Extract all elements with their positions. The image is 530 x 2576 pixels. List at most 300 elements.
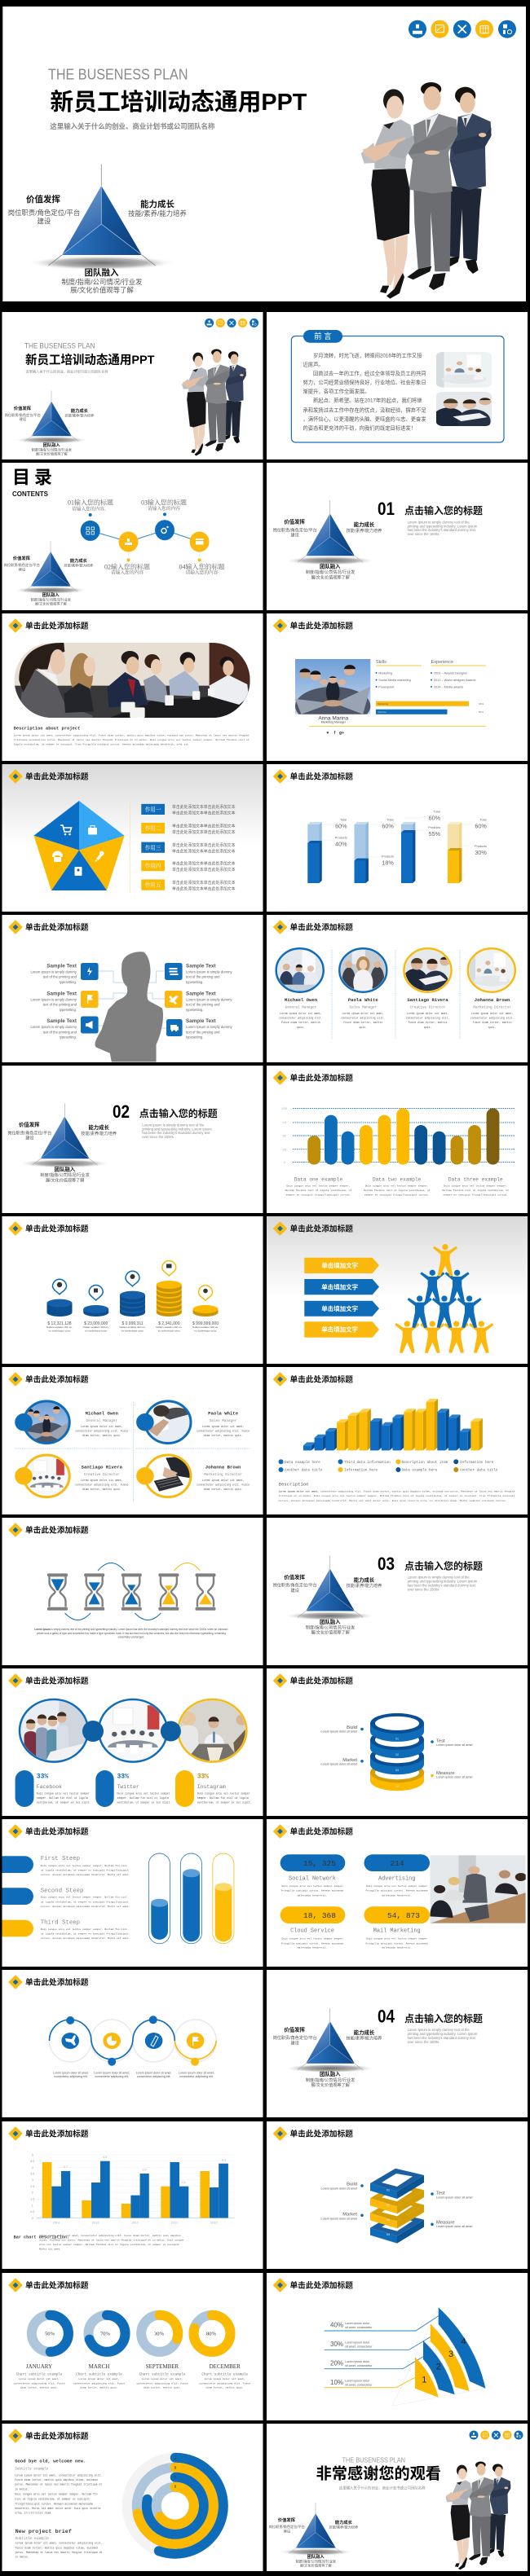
icon row (470, 2431, 523, 2439)
pyramid diagram: 岗位职责/角色定位/平台 (5, 412, 41, 418)
stat captions: Duis congue arcu vel lectus semper semper (282, 1884, 343, 1888)
portrait text: General Manager (285, 1005, 317, 1010)
donut values: 50% (45, 2332, 55, 2337)
3D columns (303, 1399, 483, 1450)
pyramid diagram: 建设 (19, 566, 26, 572)
portrait text: Michael Owen (285, 997, 318, 1003)
pyramid diagram: 制度/指南/公司情况/行业发 (296, 2559, 337, 2565)
pyramid diagram: 能力成长 (335, 2519, 353, 2525)
slide 22: tubes (2, 1819, 263, 1967)
portrait text: Sales Manager (350, 1005, 377, 1010)
donut descriptions: Lorem ipsum dolor sit amet, (205, 2377, 245, 2380)
pyramid diagram: 能力成长 (71, 407, 89, 414)
description: tristique euismod non purus. Maecenas ut lacus nec mauris feugiat tristique et in metus. Duis congue arcu vel lectus semper semper. Nullam finibus nisl ut (14, 738, 250, 741)
legend text: 单击此处添加文本单击此处添加文本 (172, 861, 236, 867)
step text: cursus. Aenean accumsan malesuada hendrerit. Morbi sit amet. (41, 1873, 130, 1876)
stat captions: fringilla suscipit cursus. Aenean accumsan (365, 1889, 428, 1892)
stat text 1: Facebook (37, 1784, 62, 1790)
donut descriptions: Lorem ipsum dolor sit amet, (78, 2377, 120, 2380)
slide header: 单击此处添加标题 (25, 1976, 89, 1987)
slide header: 单击此处添加标题 (25, 1524, 89, 1535)
left callouts: Lorem ipsum dolor sit amet (321, 1730, 357, 1734)
section pyramid and heading: 能力成长 (354, 521, 375, 528)
portrait text: consectetur adipiscing elit. (279, 1017, 323, 1020)
chart captions: Duis congue arcu vel lectus semper semper. (287, 1185, 351, 1188)
stat pills: 15, 325 (303, 1859, 336, 1868)
intro text: Duis congue arcu vel lectus semper semper. Nullam fin (15, 2493, 98, 2496)
slide header: 单击此处添加标题 (25, 2279, 89, 2290)
sail labels: sit amet, consectetur (345, 2326, 373, 2329)
foreword panel border (291, 336, 504, 442)
contents labels: 请输入您的内容。 (72, 506, 109, 512)
pyramid diagram: 能力成长 (70, 557, 88, 564)
chart note (14, 2234, 184, 2251)
section pyramid and heading: 技能/素养/能力培养 (81, 1131, 117, 1136)
stat captions: Duis congue arcu vel lectus semper semper (282, 1937, 343, 1941)
profile name: Marketing Manager (321, 720, 347, 723)
contents nodes (81, 512, 210, 562)
team text: Santiago Rivera (82, 1464, 123, 1470)
stat text 3: vestibulum, ut semper ex sus sipit. (197, 1800, 252, 1804)
connector line (91, 530, 200, 542)
wave captions: Lorem ipsum dolor sit amet, (179, 2071, 214, 2074)
portrait text: Creative Director (410, 1005, 446, 1010)
radial labels: A (174, 2456, 177, 2461)
portrait text: consectetur adipiscing elit. (342, 1017, 385, 1020)
portrait text: Johanna Brown (475, 997, 510, 1003)
bar chart: 2014 (53, 2221, 60, 2224)
stacked rings: 02 (395, 1753, 399, 1756)
pyramid diagram: 展/文化价值观等了解 (36, 451, 68, 456)
contents labels: 请输入您的内容 (148, 505, 180, 512)
bar chart: 4.5 (103, 2156, 107, 2159)
y axis labels: 50 (282, 1134, 287, 1138)
slide 9: 3D bars (267, 764, 528, 912)
slide header (9, 1222, 89, 1235)
right callouts: Measure (436, 1771, 455, 1776)
stat pills: 18, 368 (303, 1911, 336, 1920)
section pyramid and heading: 团队融入 (320, 2070, 341, 2077)
chart captions: Data one example (294, 1176, 342, 1183)
team text: Lorem ipsum dolor sit amet, (81, 1479, 123, 1482)
step text (41, 1856, 130, 1940)
legend boxes: 作用一 (145, 806, 161, 813)
section pyramid and heading: 展/文化价值观等了解 (311, 1630, 350, 1636)
section pyramid and heading (273, 499, 483, 580)
radial labels: D (174, 2484, 177, 2489)
section pyramid and heading (273, 1554, 483, 1636)
stat captions: malesuada hendrerit. (382, 1946, 412, 1950)
chart captions: Nullam finibus nisl ut ligula vestibulum, ut (364, 1189, 431, 1192)
donut descriptions: diam tortor, mattis quis. (205, 2386, 244, 2389)
pyramid diagram: 展/文化价值观等了解 (35, 601, 67, 607)
stacked boxes: 01 (386, 2188, 390, 2191)
chart note: Bar chart description: (14, 2235, 69, 2240)
donut values: 80% (206, 2332, 217, 2337)
slide header: 单击此处添加标题 (290, 1675, 353, 1686)
pyramid diagram: 技能/素养/能力培养 (64, 412, 95, 418)
slide header: 单击此处添加标题 (25, 2128, 89, 2139)
project brief (15, 2529, 103, 2559)
stat text 3: semper. Nullam fin nisl ut ligula (197, 1796, 249, 1800)
experience list: 2001 – Awards Designer (434, 671, 468, 675)
column chart (307, 815, 477, 883)
tagline: 这里输入关于什么的创业、商业计划书或公司团队名称 (26, 368, 108, 374)
chart captions (285, 1176, 509, 1196)
contents labels: 01输入您的标题 (68, 498, 113, 506)
title: 新员工培训动态通用PPT (25, 352, 155, 367)
legend text: 单击此处添加文本单击此处添加文本 (172, 849, 236, 855)
column labels: Total (434, 810, 440, 813)
skills list: Marketing (378, 671, 392, 675)
foreword text: 承和发扬过去工作中存在的优点，汲取经验，摒弃不足 (303, 406, 426, 413)
column labels: 60% (382, 823, 394, 830)
connecting arcs (65, 1563, 200, 1620)
stat text 1: semper. Nullam fin nisl ut ligula (37, 1796, 88, 1800)
team text: consectetur adipiscing elit. Fusce (75, 1429, 128, 1432)
icon row (409, 20, 516, 38)
photo: team huddle (295, 659, 370, 714)
slide 31: thank you (267, 2424, 528, 2571)
slide header: 单击此处添加标题 (290, 921, 353, 932)
slide 23: stats and photo (267, 1819, 528, 1967)
chart note: arcu vel lectus semper semper. Nullam finibus nisl ut ligula vestibulum, ut semper ex suscipit (39, 2243, 179, 2246)
stat captions: Cloud Service (290, 1928, 334, 1935)
bar chart: 2012 (132, 2221, 139, 2224)
caption (34, 1628, 228, 1639)
right callouts: Lorem ipsum dolor sit amet (436, 1743, 472, 1747)
stat captions: Social Network (289, 1876, 336, 1883)
slide header: 单击此处添加标题 (290, 2279, 353, 2290)
radial labels: C (174, 2475, 177, 2480)
sail wedges: 4 (461, 2337, 466, 2347)
sail wedges: 3 (448, 2350, 453, 2359)
legend text: 单击此处添加文本单击此处添加文本 (172, 867, 236, 873)
bar chart: 2011 (171, 2221, 178, 2224)
legend text: 单击此处添加文本单击此处添加文本 (172, 842, 236, 848)
intro text: purus. Maecenas ut lacus nec mauris feugiat tristique et (15, 2483, 102, 2486)
team text: Lorem ipsum dolor sit amet, (202, 1425, 245, 1428)
right captions: typesetting. (186, 1035, 203, 1040)
stat text 1: Duis congue arcu vel lectus semper (37, 1791, 90, 1795)
stat pills: 54, 873 (387, 1911, 420, 1920)
donut descriptions: Chart subtitle example (16, 2372, 63, 2377)
step text: cursus. Aenean accumsan malesuada hendrerit. Morbi sit amet. (41, 1905, 130, 1908)
subtitle english: THE BUSENESS PLAN (24, 341, 95, 349)
social icons (327, 731, 344, 736)
stack values: eu scelerisque tortor (158, 1330, 180, 1333)
stat text 3: 33% (197, 1773, 209, 1780)
photo: three business people (361, 82, 492, 299)
project brief: New project brief (15, 2529, 72, 2535)
tagline: 这里输入关于什么的创业、商业计划书或公司团队名称 (339, 2485, 426, 2491)
description (14, 727, 250, 746)
leader lines (325, 2316, 439, 2388)
pyramid diagram: 建设 (284, 2528, 291, 2534)
chart legend: Third data information (344, 1461, 391, 1465)
team text: consectetur adipiscing elit. Fusce (197, 1483, 250, 1486)
slide header (274, 1373, 353, 1386)
step text: First Steep (41, 1856, 80, 1862)
legend text: 单击此处添加文本单击此处添加文本 (172, 811, 236, 816)
section pyramid and heading: has been the industry's standard dummy text (408, 528, 476, 532)
team text: Michael Owen (86, 1411, 119, 1417)
slide 3: foreword (267, 312, 528, 459)
left captions: text of the printing and (43, 974, 77, 979)
experience list: 2012 – World designer Awards (434, 679, 476, 682)
stack values: Nullam sodales nibh eu, (83, 1325, 109, 1329)
tagline: 这里输入关于什么的创业、商业计划书或公司团队名称 (50, 122, 215, 130)
wave captions (53, 2071, 214, 2078)
bar chart: 2.5 (181, 2181, 186, 2184)
radial bar chart (127, 2458, 223, 2554)
chart note: Lorem ipsum dolor sit amet, consectetur adipiscing elit. Fusce diam tortor, mattis quis dapibus (39, 2234, 181, 2237)
slide 18: hourglasses (2, 1518, 263, 1665)
caption: printer took a galley of type and scrambled it to make a type specimen book. It has survived not only five centuries, but also the leap into electronic typesetting, remaining (37, 1632, 226, 1635)
stat captions: malesuada hendrerit. (382, 1893, 412, 1897)
section pyramid and heading: 建设 (291, 533, 299, 538)
stat text 2: vestibulum, ut semper ex sus sipit. (117, 1800, 172, 1804)
section pyramid and heading: 制度/指南/公司情况/行业发 (40, 1172, 90, 1178)
slide 1: cover (2, 7, 526, 301)
pyramid diagram: 团队融入 (85, 267, 119, 278)
section pyramid and heading: 建设 (291, 2040, 299, 2046)
pyramid diagram: 价值发挥 (14, 405, 32, 411)
left callouts: Lorem ipsum dolor sit amet (321, 2187, 357, 2190)
stat captions (281, 1876, 428, 1950)
sail labels: 40% (330, 2322, 343, 2329)
chart captions: semper ex suscipit fringillasucipit cursus. (364, 1193, 430, 1196)
section pyramid and heading: 岗位职责/角色定位/平台 (273, 2035, 317, 2041)
donut values: 70% (100, 2332, 111, 2337)
section pyramid and heading: 价值发挥 (284, 1573, 306, 1580)
chart captions: semper ex suscipit fringillasucipit cursus. (443, 1193, 508, 1196)
skills list: Skills (376, 660, 386, 665)
section pyramid and heading: 点击输入您的标题 (139, 1107, 218, 1119)
skill bars: 94% (479, 702, 484, 706)
slide header (274, 921, 353, 934)
left captions (30, 963, 77, 1040)
right captions: Sample Text (186, 1018, 217, 1024)
intro text: Fusce diam tortor, mattis quis dapibus vitae, euismod (15, 2478, 98, 2481)
section pyramid and heading: 技能/素养/能力培养 (347, 2036, 382, 2042)
section pyramid and heading (273, 2007, 483, 2088)
social icons: ♥ (327, 731, 329, 736)
slide header: 单击此处添加标题 (290, 1072, 353, 1083)
chart captions: Data two example (373, 1176, 422, 1183)
pyramid diagram: 展/文化价值观等了解 (70, 286, 134, 294)
intro text: nisl ut ligula vestibulum, ut semper ex suscipit (15, 2498, 90, 2501)
arrow labels: 单击填加文字 (321, 1325, 359, 1334)
donut descriptions: diam tortor, mattis quis. (20, 2386, 58, 2389)
slide 24: wave process (2, 1970, 263, 2117)
right callouts: Lorem ipsum dolor sit amet (436, 2196, 472, 2199)
bar chart: 2013 (92, 2221, 99, 2224)
pyramid diagram: 团队融入 (42, 591, 60, 598)
left captions: Lorem Ipsum is simply dummy (30, 1025, 77, 1029)
contents labels (68, 498, 225, 575)
profile name: Anna Marina (318, 715, 349, 721)
chart legend: Another data title (460, 1468, 498, 1473)
y axis labels: 4.5 (30, 2160, 34, 2163)
left captions: Lorem Ipsum is simply dummy (30, 969, 77, 974)
slide header (274, 1222, 353, 1235)
project brief: in metus. (15, 2556, 29, 2559)
radial labels: B (174, 2466, 177, 2471)
section pyramid and heading: 能力成长 (354, 1576, 375, 1584)
photo: meeting room (436, 352, 492, 388)
donut descriptions: Chart subtitle example (139, 2372, 186, 2377)
y axis labels: 0.5 (30, 2210, 34, 2213)
photo: handshake (436, 392, 492, 426)
donut descriptions: diam tortor, mattis quis. (80, 2386, 118, 2389)
slide header: 单击此处添加标题 (25, 2430, 89, 2441)
chart captions: Duis congue arcu vel lectus semper semper. (365, 1185, 429, 1188)
skill bars: Website (378, 710, 386, 714)
left callouts: Lorem ipsum dolor sit amet (321, 2217, 357, 2220)
section pyramid and heading: 展/文化价值观等了解 (46, 1177, 84, 1183)
slide header (274, 770, 353, 783)
stat text 2 (117, 1773, 172, 1804)
pyramid diagram: 制度/指南/公司情况/行业发 (32, 446, 73, 452)
experience list: Experience (431, 660, 453, 665)
section pyramid and heading: 岗位职责/角色定位/平台 (273, 1583, 317, 1589)
team text: Marketing Director (204, 1473, 242, 1477)
team text: diam tortor, mattis quis. (204, 1488, 243, 1491)
description: ligula vestibulum, ut semper ex suscipit. Cras fringilla suscipit cursus. Aenean accumsan malesuada hendrerit, orbi sit (14, 743, 188, 746)
stacked boxes: 04 (386, 2233, 390, 2236)
donut values (45, 2332, 217, 2337)
column labels: 18% (382, 859, 394, 867)
left callouts: Build (347, 2183, 357, 2187)
slide header (9, 1373, 89, 1386)
slide 20: three circle photos (2, 1668, 263, 1816)
sail labels: Lorem ipsum dolor (345, 2322, 370, 2325)
section pyramid and heading: Lorem Ipsum is simply dummy text of the (408, 2028, 470, 2032)
portrait circles (276, 948, 515, 999)
title: 新员工培训动态通用PPT (50, 89, 307, 116)
step text: cursus. Aenean accumsan malesuada hendrerit. Morbi sit amet. (41, 1936, 130, 1940)
pyramid diagram: 技能/素养/能力培养 (329, 2525, 359, 2530)
stat text 3 (197, 1773, 252, 1804)
intro text: in metus. (15, 2487, 29, 2490)
slide header: 单击此处添加标题 (290, 1374, 353, 1384)
bar chart: 2010 (210, 2221, 218, 2224)
legend boxes: 作用四 (145, 862, 161, 869)
stack values: $ 23,000,000 (84, 1321, 108, 1326)
legend boxes: 作用五 (145, 881, 161, 889)
stacked rings: 01 (395, 1737, 399, 1740)
slide header: 单击此处添加标题 (25, 921, 89, 932)
pyramid diagram: 技能/素养/能力培养 (128, 209, 187, 218)
slide 19: section 03 (267, 1518, 528, 1665)
pentagon diagram (34, 801, 125, 890)
pyramid diagram: 团队融入 (43, 442, 60, 448)
section pyramid and heading: Lorem Ipsum is simply dummy text of the (142, 1123, 205, 1127)
left captions: typesetting. (60, 980, 77, 984)
left captions: text of the printing and (43, 1002, 77, 1006)
slide header: 单击此处添加标题 (290, 771, 353, 781)
intro text: urna, in ultricies diam. (15, 2512, 52, 2515)
intro text (15, 2458, 102, 2515)
radial labels (174, 2456, 177, 2489)
right captions: text of the printing and (186, 1030, 220, 1034)
stat text 1: 33% (37, 1773, 48, 1780)
section pyramid and heading: 团队融入 (320, 562, 341, 569)
right captions: text of the printing and (186, 974, 220, 979)
section pyramid and heading: printing and typesetting industry. Lorem Ipsum (408, 1580, 478, 1584)
portrait text: Fusce diam tortor, mattis (473, 1021, 512, 1024)
skill bars: 80% (479, 710, 484, 714)
pyramid diagram (4, 541, 94, 607)
section pyramid and heading: ever since the 1500s. (408, 2040, 439, 2044)
arrow labels: 单击填加文字 (321, 1282, 359, 1290)
profile name (318, 715, 349, 723)
column labels: Total (340, 818, 347, 821)
slide header (9, 921, 89, 934)
portrait text: Lorem ipsum dolor sit amet, (280, 1012, 322, 1015)
stack values (46, 1321, 219, 1333)
caption: essentially unchanged. (118, 1636, 144, 1639)
y axis labels: 5 (32, 2153, 33, 2156)
test tube chart (148, 1853, 234, 1944)
stack values: eu scelerisque tortor (85, 1330, 107, 1333)
slide 30: radial bars (2, 2424, 263, 2571)
wave captions: consectetur adipiscing elit. (95, 2075, 129, 2078)
stat text 1: vestibulum, ut semper ex sus sipit. (37, 1800, 91, 1804)
stat captions: Mail Marketing (373, 1928, 421, 1935)
slide 25: section 04 (267, 1970, 528, 2117)
stacked rings (370, 1713, 424, 1791)
slide header (9, 1674, 89, 1687)
description: Lorem ipsum dolor sit amet, consectetur adipiscing elit. Fusce diam tortor, mattis quis dapibus vitae, euismod non purus. Maecenas ut lacus nec mauris feugiat (14, 733, 250, 736)
step text: Third Steep (41, 1919, 80, 1926)
column labels: 60% (429, 815, 441, 822)
human pyramid figures (395, 1244, 493, 1353)
slide 27: box stack (267, 2121, 528, 2269)
slide header (9, 2279, 89, 2292)
chart description: tristique et in metus. Duis congue arcu vel lectus semper semper. Nullam finibus nisl ut ligula vestibulum, ut semper ex suscipit. Cras fringilla suscipit (279, 1494, 515, 1497)
chart description: Lorem ipsum dolor sit amet, consectetur adipiscing elit. Fusce diam tortor, mattis quis dapibus vitae, euismod non purus. Maecenas ut lacus nec mauris feugiat (279, 1490, 515, 1493)
slide header (274, 1674, 353, 1687)
y axis labels: 2.5 (30, 2185, 34, 2188)
section pyramid and heading: 04 (378, 2007, 395, 2027)
pyramid diagram: 制度/指南/公司情况/行业发 (61, 278, 143, 286)
portrait text: consectetur adipiscing elit. (406, 1017, 449, 1020)
bar chart: 4.3 (222, 2159, 226, 2162)
slide header (9, 2429, 89, 2442)
portrait text: Fusce diam tortor, mattis (409, 1021, 447, 1024)
pyramid diagram (5, 391, 95, 456)
section pyramid and heading: 价值发挥 (284, 2025, 306, 2033)
chart legend: Description about item (401, 1461, 448, 1465)
section pyramid and heading: printing and typesetting industry. Lorem Ipsum (142, 1127, 212, 1131)
chart captions: Nullam finibus nisl ut ligula vestibulum, ut (285, 1189, 351, 1192)
pyramid diagram (8, 165, 187, 294)
photo: business people (182, 349, 246, 456)
stat captions: Duis congue arcu vel lectus semper semper (366, 1937, 427, 1941)
donut descriptions: consectetur adipiscing elit. Fusce (13, 2381, 65, 2385)
slide header: 单击此处添加标题 (25, 1675, 89, 1686)
skills list: Social Media marketing (378, 679, 411, 682)
stacked boxes: 02 (386, 2203, 390, 2206)
legend text (172, 804, 236, 891)
contents labels: 请输入您的内容 (186, 569, 219, 575)
right callouts (431, 1739, 472, 1779)
portrait text: Fusce diam tortor, mattis (343, 1021, 382, 1024)
right captions: Lorem Ipsum is simply dummy (186, 969, 232, 974)
legend boxes (141, 804, 165, 890)
